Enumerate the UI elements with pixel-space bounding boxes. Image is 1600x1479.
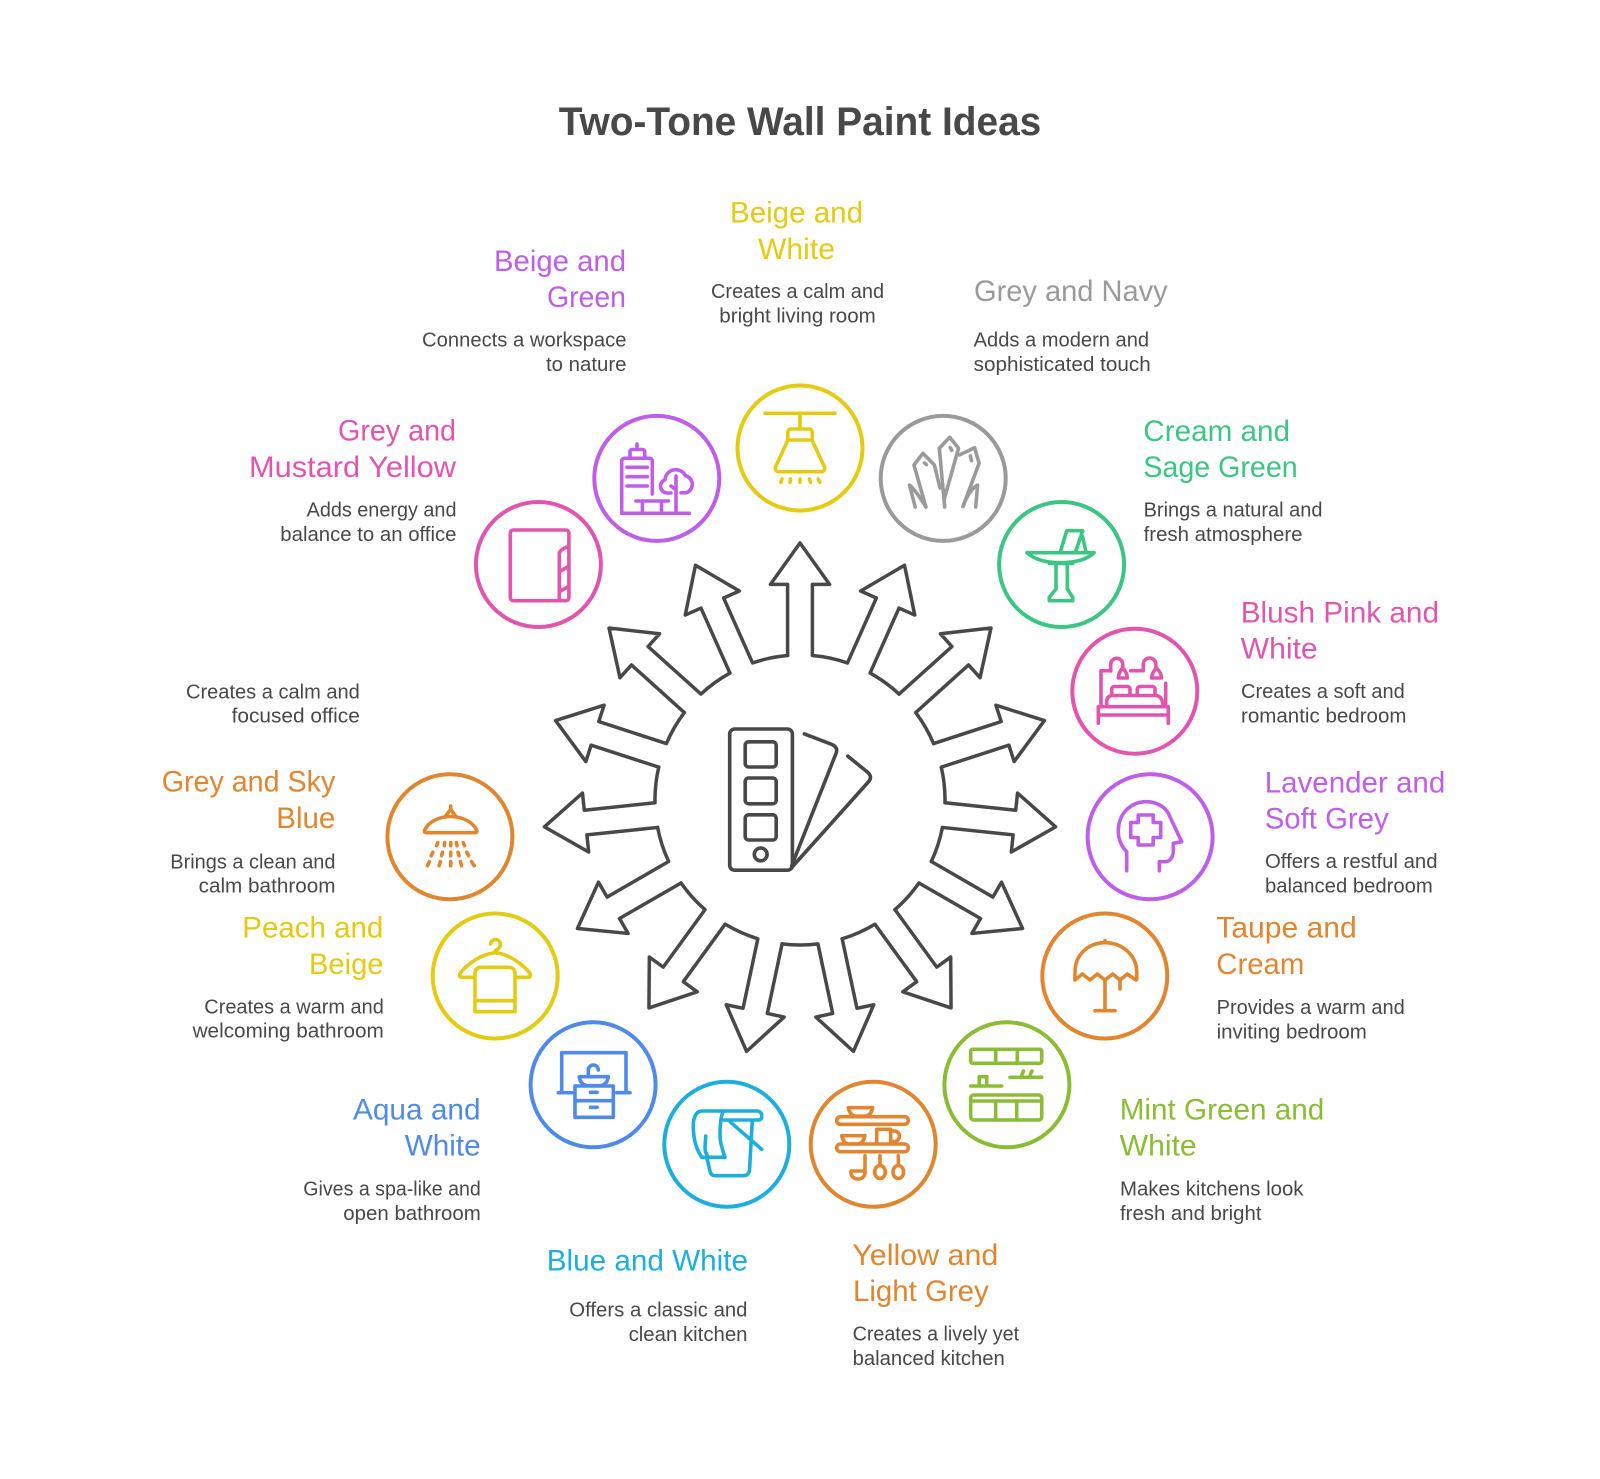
heading	[1143, 415, 1298, 484]
description	[974, 330, 1151, 376]
heading: Peach and	[242, 911, 383, 944]
description: fresh atmosphere	[1144, 524, 1302, 546]
description: bright living room	[719, 306, 876, 328]
description: Creates a soft and	[1241, 681, 1405, 703]
icon: building with tree and bench	[594, 416, 719, 541]
heading: Mustard Yellow	[249, 451, 456, 484]
heading: Light Grey	[853, 1275, 989, 1308]
item: Yellow and Light Grey	[811, 1082, 1020, 1370]
description	[711, 281, 884, 328]
heading: Grey and Navy	[974, 275, 1168, 308]
heading	[1265, 766, 1445, 836]
description	[1120, 1179, 1305, 1225]
description: Provides a warm and	[1217, 997, 1405, 1019]
item: Blue and White	[547, 1082, 789, 1346]
description: Offers a restful and	[1265, 851, 1438, 873]
item: Beige and White	[711, 197, 884, 510]
description: to nature	[546, 354, 626, 376]
icon: vanity sink and mirror	[531, 1022, 656, 1147]
description	[170, 851, 336, 898]
heading: Grey and Sky	[162, 766, 335, 799]
item: Cream and Sage Green	[999, 415, 1322, 627]
item: Grey and Navy	[881, 275, 1168, 541]
heading: Lavender and	[1265, 766, 1445, 799]
description: inviting bedroom	[1217, 1021, 1367, 1043]
heading: Cream	[1216, 948, 1304, 981]
heading	[494, 245, 626, 314]
description: Brings a natural and	[1144, 500, 1322, 522]
heading: Yellow and	[852, 1239, 998, 1272]
title: Two-Tone Wall Paint Ideas	[559, 100, 1041, 144]
description: clean kitchen	[629, 1324, 748, 1346]
description	[569, 1300, 748, 1346]
icon: kitchen cabinets	[944, 1022, 1069, 1147]
item: Beige and Green	[422, 245, 719, 541]
heading	[162, 766, 335, 835]
heading: Beige and	[730, 197, 863, 230]
description	[303, 1178, 481, 1225]
description: Creates a calm and focused office: Creates a calm and	[186, 681, 360, 703]
description: Connects a workspace	[422, 330, 626, 352]
item: Taupe and Cream	[1042, 912, 1405, 1043]
icon: shower head	[387, 774, 512, 899]
icon: crystals	[881, 416, 1006, 541]
description: sophisticated touch	[974, 354, 1151, 376]
description	[280, 500, 456, 546]
heading: Green	[547, 281, 626, 314]
description: Makes kitchens look	[1120, 1179, 1305, 1201]
heading: Blue and White	[547, 1245, 748, 1278]
icon: bed with lamps	[1072, 629, 1197, 754]
heading: Taupe and	[1216, 912, 1357, 945]
description: Creates a calm and	[711, 281, 884, 303]
description: romantic bedroom	[1241, 706, 1406, 728]
heading: Soft Grey	[1265, 803, 1389, 836]
heading	[1216, 912, 1357, 981]
heading: White	[1120, 1130, 1197, 1163]
description	[1144, 500, 1322, 546]
item: Lavender and Soft Grey	[1088, 766, 1445, 899]
heading: Beige	[309, 948, 384, 981]
description: Brings a clean and	[170, 851, 336, 873]
description: Creates a lively yet	[853, 1324, 1020, 1346]
icon: kitchen shelves with dishes	[811, 1082, 936, 1207]
description: balance to an office	[280, 524, 456, 546]
heading	[730, 197, 863, 266]
heading: Beige and	[494, 245, 626, 278]
heading	[1241, 596, 1439, 666]
description: Creates a warm and	[204, 996, 384, 1018]
heading: Mint Green and	[1120, 1093, 1324, 1126]
description: balanced kitchen	[853, 1348, 1005, 1370]
description: Creates a calm and focused office: focused office	[232, 706, 360, 728]
heading	[1120, 1093, 1324, 1163]
heading	[353, 1093, 481, 1163]
description: welcoming bathroom	[192, 1021, 384, 1043]
description	[422, 330, 626, 376]
description: Gives a spa-like and	[303, 1178, 481, 1200]
heading: Blush Pink and	[1241, 596, 1439, 629]
central ring of radiating arrows	[539, 543, 1059, 1061]
item: Grey and Sky Blue	[162, 766, 512, 899]
description	[1241, 681, 1406, 728]
item: Mint Green and White	[944, 1022, 1324, 1225]
heading: White	[405, 1130, 481, 1163]
description: open bathroom	[343, 1203, 481, 1225]
item: Peach and Beige	[192, 911, 558, 1043]
description: Offers a classic and	[569, 1300, 748, 1322]
heading	[249, 415, 456, 484]
heading: Aqua and	[353, 1093, 480, 1126]
heading: Cream and	[1143, 415, 1290, 448]
description	[1265, 851, 1438, 898]
icon: head with medical cross	[1088, 774, 1213, 899]
heading: White	[758, 233, 835, 266]
description: Creates a calm and focused office	[186, 681, 360, 728]
description	[1217, 997, 1405, 1043]
heading: Blue	[276, 802, 335, 835]
description: calm bathroom	[199, 876, 336, 898]
heading: Sage Green	[1143, 451, 1298, 484]
item: Aqua and White	[303, 1022, 656, 1225]
icon: patio umbrella	[1042, 914, 1167, 1038]
heading	[852, 1239, 998, 1308]
item: Grey and Mustard Yellow	[249, 415, 601, 627]
item: Blush Pink and White	[1072, 596, 1439, 754]
description: balanced bedroom	[1265, 876, 1433, 898]
icon: towel on hanger	[433, 914, 558, 1038]
icon: pedestal basin	[999, 502, 1124, 627]
icon: bucket with cloth	[664, 1082, 789, 1207]
heading: White	[1241, 633, 1318, 666]
icon: folder notebook	[476, 502, 601, 627]
icon: ceiling lamp	[738, 386, 862, 510]
description	[192, 996, 384, 1043]
description	[853, 1324, 1020, 1370]
description: Adds energy and	[307, 500, 456, 522]
heading: Grey and	[338, 415, 456, 448]
description: fresh and bright	[1120, 1203, 1262, 1225]
description: Adds a modern and	[974, 330, 1149, 352]
icon: central paint swatch fan	[730, 729, 870, 870]
heading	[242, 911, 384, 981]
